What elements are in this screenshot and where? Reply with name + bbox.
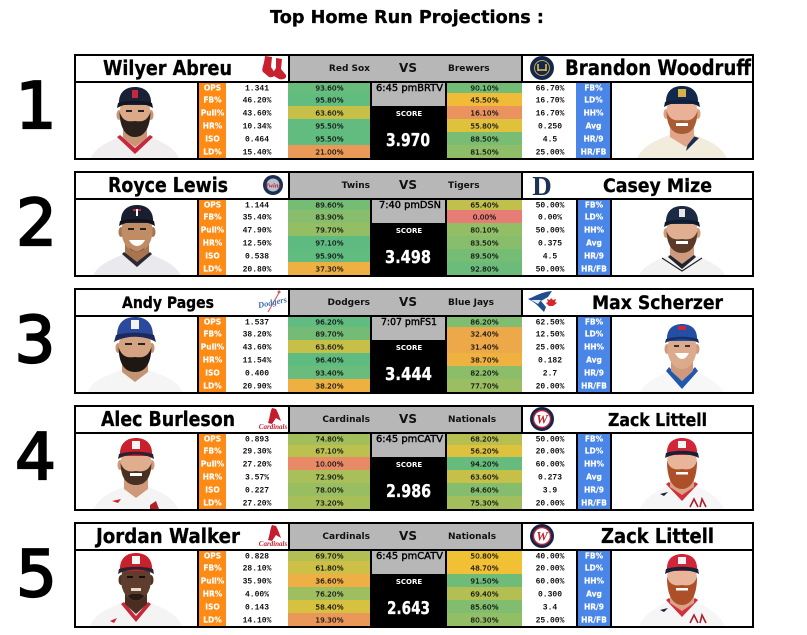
pitcher percentile heat column: 86.20%	[470, 318, 499, 326]
left team name: Twins	[342, 181, 370, 191]
panel: matchup card 1	[74, 54, 754, 160]
pitcher stat labels: FB%	[585, 318, 604, 326]
batter percentile heat column: 95.90%	[315, 252, 344, 260]
pitcher percentile heat column	[470, 318, 499, 390]
pitcher stat values: 0.375	[538, 240, 562, 248]
batter stat labels: OPS	[204, 434, 221, 444]
logo: Cardinals	[259, 408, 287, 431]
versus label: VS	[399, 295, 417, 309]
logo: Twins	[263, 175, 283, 195]
pitcher percentile heat column: 50.80%	[470, 552, 499, 560]
batter percentile heat column: 63.60%	[315, 108, 344, 118]
batter stat values	[243, 318, 272, 392]
pitcher percentile heat column: 89.50%	[470, 252, 499, 260]
pitcher percentile heat column: 94.20%	[470, 460, 499, 468]
pitcher stat labels: HH%	[584, 226, 605, 234]
pitcher percentile heat column: 65.40%	[470, 200, 499, 210]
game time: 6:45 pmCATV	[376, 434, 443, 445]
batter stat labels: FB%	[203, 446, 222, 456]
batter percentile heat column	[315, 84, 344, 156]
versus label: VS	[399, 529, 417, 543]
pitcher stat labels: Avg	[586, 590, 602, 598]
pitcher stat values: 3.4	[543, 604, 557, 612]
pitcher stat values: 25.00%	[536, 148, 565, 158]
pitcher stat labels: HH%	[583, 108, 604, 118]
right team name: Tigers	[448, 181, 480, 191]
title: Top Home Run Projections :	[270, 8, 544, 28]
logo: Dodgers: Dodgers	[256, 294, 288, 310]
right team name: Blue Jays	[448, 298, 494, 308]
batter stat values: 47.90%	[243, 226, 272, 236]
pitcher stat values: 12.50%	[536, 330, 565, 340]
rank number 1: 1	[16, 70, 56, 144]
batter stat labels: Pull%	[201, 460, 225, 468]
batter stat values: 35.90%	[243, 578, 272, 586]
score label: SCORE	[396, 461, 422, 469]
left player photo	[90, 553, 182, 626]
logo: Nationals: W	[536, 412, 549, 426]
batter stat labels: Pull%	[201, 108, 225, 118]
batter percentile heat column	[315, 200, 344, 274]
batter percentile heat column: 58.40%	[315, 602, 344, 612]
left team name: Red Sox	[329, 64, 370, 74]
pitcher percentile heat column: 80.30%	[470, 616, 499, 624]
logo: Blue Jays	[528, 291, 557, 312]
pitcher percentile heat column: 48.70%	[470, 564, 499, 572]
batter percentile heat column: 72.90%	[315, 472, 344, 482]
rank number 4: 4	[15, 421, 56, 495]
left player name: Jordan Walker	[94, 524, 240, 548]
pitcher percentile heat column	[470, 552, 499, 624]
game time: 7:40 pmDSN	[379, 200, 441, 211]
pitcher stat values: 0.250	[538, 122, 562, 132]
pitcher stat values: 20.00%	[536, 382, 565, 392]
left player name: Wilyer Abreu	[103, 56, 232, 80]
pitcher percentile heat column: 90.10%	[470, 84, 499, 92]
logo: Nationals: W	[536, 528, 549, 544]
batter stat labels: FB%	[203, 564, 222, 572]
batter stat labels: HR%	[203, 122, 223, 130]
pitcher stat values: 25.00%	[536, 344, 565, 352]
pitcher percentile heat column: 31.40%	[470, 342, 499, 352]
batter stat values: 1.144	[245, 202, 269, 210]
pitcher stat values: 20.00%	[536, 500, 565, 508]
pitcher stat values: 20.00%	[536, 448, 565, 456]
rank number 2: 2	[16, 187, 57, 261]
batter stat values: 29.30%	[243, 448, 272, 456]
pitcher percentile heat column: 77.70%	[470, 382, 499, 390]
batter stat values: 1.537	[245, 318, 269, 328]
pitcher stat labels	[581, 552, 607, 624]
pitcher stat labels: Avg	[586, 472, 602, 482]
batter stat labels: ISO	[205, 368, 220, 378]
batter stat labels	[201, 200, 225, 274]
pitcher stat values: 0.00%	[538, 214, 562, 222]
pitcher stat values	[536, 84, 565, 158]
pitcher stat labels: FB%	[585, 434, 604, 444]
logo: Cardinals: Cardinals	[259, 423, 287, 431]
batter percentile heat column: 74.80%	[315, 434, 344, 444]
batter stat values	[243, 84, 272, 158]
batter percentile heat column: 89.70%	[315, 330, 344, 338]
right team name: Nationals	[448, 415, 496, 425]
score label: SCORE	[396, 578, 422, 586]
score label: SCORE	[396, 110, 422, 118]
logo: Tigers: D	[532, 171, 552, 201]
pitcher stat values: 2.7	[543, 370, 557, 378]
pitcher percentile heat column: 0.00%	[473, 212, 496, 222]
pitcher stat values: 60.00%	[536, 460, 565, 470]
batter percentile heat column: 93.60%	[315, 84, 344, 92]
batter percentile heat column: 37.30%	[315, 264, 344, 274]
score value: 3.498	[385, 247, 431, 268]
panel: matchup card 2	[74, 171, 754, 279]
pitcher percentile heat column: 88.50%	[470, 134, 499, 144]
pitcher percentile heat column: 80.10%	[470, 226, 499, 234]
pitcher percentile heat column: 55.80%	[470, 122, 499, 130]
logo: Nationals	[530, 524, 554, 548]
batter stat labels: OPS	[204, 318, 221, 326]
pitcher stat labels: HR/9	[584, 486, 604, 494]
right pitcher name: Casey Mize	[603, 175, 712, 197]
pitcher stat labels: HR/FB	[581, 148, 607, 156]
batter stat values: 46.20%	[243, 96, 272, 106]
batter percentile heat column: 95.80%	[315, 96, 344, 104]
rank number 3: 3	[15, 304, 55, 378]
pitcher stat labels	[581, 434, 607, 508]
left player name: Royce Lewis	[108, 173, 228, 197]
pitcher stat labels: LD%	[584, 96, 603, 104]
logo: Nationals	[530, 407, 554, 431]
batter stat labels: HR%	[203, 472, 223, 482]
batter stat labels: ISO	[205, 602, 220, 612]
pitcher stat labels: HR/FB	[581, 498, 607, 508]
pitcher percentile heat column: 85.60%	[470, 602, 499, 612]
versus label: VS	[399, 178, 417, 192]
versus label: VS	[399, 61, 417, 75]
pitcher percentile heat column: 83.50%	[470, 238, 499, 248]
batter stat labels	[201, 434, 225, 508]
batter stat values: 0.464	[245, 136, 269, 144]
batter stat labels: Pull%	[201, 226, 225, 234]
pitcher stat labels: FB%	[585, 552, 604, 560]
batter percentile heat column	[315, 552, 344, 624]
batter stat labels: Pull%	[201, 342, 225, 352]
pitcher stat values	[536, 202, 565, 274]
panel: matchup card 5	[74, 522, 754, 627]
batter stat values: 35.40%	[243, 214, 272, 222]
pitcher percentile heat column: 56.20%	[470, 446, 499, 456]
batter percentile heat column: 79.70%	[315, 226, 344, 234]
batter stat values	[243, 436, 272, 508]
game time: 6:45 pmBRTV	[376, 83, 443, 94]
score value: 3.970	[386, 130, 430, 151]
right player photo	[639, 438, 725, 511]
batter stat values: 27.20%	[243, 460, 272, 470]
batter percentile heat column: 95.50%	[315, 122, 344, 130]
pitcher stat labels: HR/FB	[581, 264, 607, 274]
pitcher stat values: 16.70%	[536, 96, 565, 106]
batter stat values	[243, 552, 272, 626]
batter stat values: 10.34%	[243, 122, 272, 132]
logo: Red Sox	[262, 56, 286, 79]
batter stat labels: HR%	[203, 590, 223, 598]
pitcher stat values: 16.70%	[536, 110, 565, 118]
pitcher stat values	[536, 552, 565, 626]
pitcher percentile heat column: 81.50%	[470, 148, 499, 156]
logo: Twins: Twins	[265, 182, 281, 190]
batter stat values: 0.400	[245, 370, 269, 378]
score label: SCORE	[396, 227, 422, 235]
pitcher percentile heat column	[470, 84, 499, 156]
score label: SCORE	[396, 344, 422, 352]
pitcher stat values: 4.5	[543, 252, 557, 262]
left team name: Dodgers	[328, 298, 370, 308]
batter stat labels: HR%	[203, 238, 223, 248]
batter stat labels	[201, 552, 225, 624]
pitcher percentile heat column: 91.50%	[470, 576, 499, 586]
right team name: Nationals	[448, 532, 496, 542]
pitcher stat labels	[581, 200, 607, 274]
batter percentile heat column: 93.40%	[315, 368, 344, 378]
pitcher stat labels: Avg	[586, 356, 602, 364]
pitcher percentile heat column: 82.20%	[470, 368, 499, 378]
batter stat labels: LD%	[203, 148, 222, 156]
logo: Brewers	[530, 56, 554, 80]
right player photo	[637, 86, 727, 159]
batter percentile heat column: 10.00%	[315, 460, 344, 468]
left player name: Andy Pages	[122, 293, 214, 312]
batter stat values: 38.20%	[243, 330, 272, 340]
pitcher percentile heat column: 68.20%	[470, 434, 499, 444]
batter percentile heat column: 95.50%	[315, 134, 344, 144]
batter stat labels	[201, 318, 225, 390]
logo: Cardinals	[259, 525, 287, 548]
rank number 5: 5	[16, 538, 57, 612]
pitcher stat labels: LD%	[585, 212, 604, 222]
batter stat values: 28.10%	[243, 564, 272, 574]
pitcher stat values: 62.50%	[536, 318, 565, 328]
right player photo	[664, 324, 700, 389]
batter percentile heat column: 97.10%	[315, 238, 344, 248]
pitcher stat labels	[581, 84, 607, 156]
pitcher stat labels: Avg	[586, 122, 601, 130]
batter stat labels: FB%	[203, 96, 222, 104]
batter stat values: 4.00%	[245, 590, 269, 600]
pitcher stat values: 4.5	[543, 136, 557, 144]
pitcher stat values: 50.00%	[536, 266, 565, 274]
batter stat values: 14.10%	[243, 616, 272, 626]
pitcher stat labels: HR/9	[584, 602, 604, 612]
pitcher stat values: 3.9	[543, 486, 557, 496]
batter percentile heat column: 89.60%	[315, 200, 344, 210]
pitcher stat labels: FB%	[584, 84, 603, 92]
batter percentile heat column: 61.80%	[315, 564, 344, 572]
batter stat labels: LD%	[203, 616, 222, 624]
pitcher percentile heat column: 38.70%	[470, 356, 499, 364]
batter stat values: 43.60%	[243, 344, 272, 352]
pitcher stat labels: HH%	[584, 576, 605, 586]
batter percentile heat column: 73.20%	[315, 498, 344, 508]
batter stat values: 15.40%	[243, 148, 272, 158]
pitcher percentile heat column	[470, 434, 499, 508]
batter stat labels	[201, 84, 225, 156]
batter stat labels: ISO	[205, 252, 220, 260]
batter percentile heat column: 96.40%	[315, 356, 344, 364]
pitcher stat labels: HH%	[584, 460, 605, 468]
logo: Cardinals: Cardinals	[259, 540, 287, 548]
batter percentile heat column: 76.20%	[315, 590, 344, 598]
batter percentile heat column: 83.90%	[315, 212, 344, 222]
pitcher percentile heat column: 69.40%	[470, 590, 499, 598]
versus label: VS	[399, 412, 417, 426]
batter percentile heat column: 96.20%	[315, 318, 344, 326]
pitcher stat labels: HR/FB	[581, 382, 607, 390]
pitcher stat labels: LD%	[585, 564, 604, 572]
batter stat values: 1.341	[245, 84, 269, 94]
batter stat labels: LD%	[203, 382, 222, 390]
pitcher stat values	[536, 436, 565, 508]
score value: 2.643	[387, 598, 430, 619]
batter stat labels: ISO	[205, 134, 220, 144]
pitcher percentile heat column: 45.50%	[470, 96, 499, 104]
right player photo	[637, 206, 727, 279]
pitcher stat values: 66.70%	[536, 84, 565, 94]
right pitcher name: Zack Littell	[608, 410, 707, 431]
batter stat labels: ISO	[205, 486, 220, 494]
pitcher percentile heat column: 92.80%	[470, 264, 499, 274]
batter stat labels: Pull%	[201, 576, 225, 586]
batter stat values: 0.143	[245, 604, 269, 612]
pitcher stat labels: Avg	[586, 238, 602, 248]
panel: matchup card 3	[74, 288, 754, 397]
pitcher stat values: 25.00%	[536, 616, 565, 626]
batter percentile heat column: 21.00%	[315, 148, 344, 156]
pitcher stat labels: HH%	[584, 342, 605, 352]
batter percentile heat column	[315, 318, 344, 390]
left player name: Alec Burleson	[101, 407, 235, 431]
batter stat values	[243, 202, 272, 274]
left team name: Cardinals	[322, 415, 370, 425]
batter stat labels: OPS	[204, 84, 221, 92]
batter percentile heat column: 19.30%	[315, 616, 344, 624]
pitcher stat values: 20.00%	[536, 564, 565, 574]
batter stat values: 20.90%	[243, 382, 272, 392]
pitcher percentile heat column: 63.60%	[470, 472, 499, 482]
batter stat labels: OPS	[204, 552, 221, 560]
panel: matchup card 4	[74, 405, 754, 511]
score value: 3.444	[385, 364, 432, 385]
batter stat labels: OPS	[204, 200, 221, 210]
pitcher stat values: 60.00%	[536, 578, 565, 586]
batter stat values: 0.227	[245, 486, 269, 496]
right team name: Brewers	[448, 64, 490, 74]
pitcher stat values: 0.182	[538, 356, 562, 366]
pitcher stat labels: HR/9	[584, 252, 604, 260]
batter stat labels: HR%	[203, 356, 223, 364]
batter stat values: 3.57%	[245, 474, 269, 482]
left player photo	[93, 438, 179, 511]
left player photo	[92, 205, 182, 278]
pitcher stat labels: HR/9	[583, 134, 604, 144]
pitcher stat values: 0.300	[538, 590, 562, 600]
left team name: Cardinals	[322, 532, 370, 542]
batter stat values: 11.54%	[243, 356, 272, 366]
batter stat labels: FB%	[203, 330, 222, 338]
right pitcher name: Zack Littell	[601, 524, 714, 548]
right pitcher name: Brandon Woodruff	[565, 56, 752, 80]
batter percentile heat column: 63.60%	[315, 342, 344, 352]
batter stat values: 0.538	[245, 252, 269, 262]
batter percentile heat column: 67.10%	[315, 446, 344, 456]
pitcher stat labels	[581, 318, 607, 390]
pitcher percentile heat column: 84.60%	[470, 486, 499, 494]
pitcher percentile heat column	[470, 200, 499, 274]
right player photo	[639, 554, 725, 627]
batter percentile heat column: 69.70%	[315, 552, 344, 560]
pitcher stat labels: LD%	[585, 446, 604, 456]
left player photo	[90, 87, 180, 160]
pitcher stat labels: FB%	[585, 200, 604, 210]
right pitcher name: Max Scherzer	[592, 292, 724, 314]
pitcher percentile heat column: 32.40%	[470, 330, 499, 338]
batter percentile heat column: 38.20%	[315, 382, 344, 390]
pitcher stat labels: HR/FB	[581, 616, 607, 624]
pitcher stat values	[536, 318, 565, 392]
pitcher stat values: 50.00%	[536, 202, 565, 210]
batter stat values: 0.828	[245, 552, 269, 562]
pitcher stat values: 0.273	[538, 474, 562, 482]
pitcher stat labels: HR/9	[584, 368, 604, 378]
pitcher stat values: 40.00%	[536, 552, 565, 562]
batter stat values: 20.80%	[243, 266, 272, 274]
batter percentile heat column	[315, 434, 344, 508]
pitcher stat values: 50.00%	[536, 436, 565, 444]
batter percentile heat column: 78.00%	[315, 486, 344, 494]
batter stat values: 43.60%	[243, 110, 272, 118]
batter stat values: 12.50%	[243, 240, 272, 248]
left player photo	[88, 317, 182, 392]
game time: 7:07 pmFS1	[381, 317, 437, 328]
batter stat labels: FB%	[203, 212, 222, 222]
batter stat labels: LD%	[203, 498, 222, 508]
batter stat values: 27.20%	[243, 500, 272, 508]
pitcher percentile heat column: 16.10%	[470, 108, 499, 118]
batter percentile heat column: 36.60%	[315, 576, 344, 586]
pitcher percentile heat column: 75.30%	[470, 498, 499, 508]
batter stat values: 0.893	[245, 436, 269, 444]
score value: 2.986	[386, 481, 431, 502]
pitcher stat labels: LD%	[585, 330, 604, 338]
game time: 6:45 pmCATV	[376, 551, 443, 562]
pitcher stat values: 50.00%	[536, 226, 565, 236]
batter stat labels: LD%	[203, 264, 222, 274]
